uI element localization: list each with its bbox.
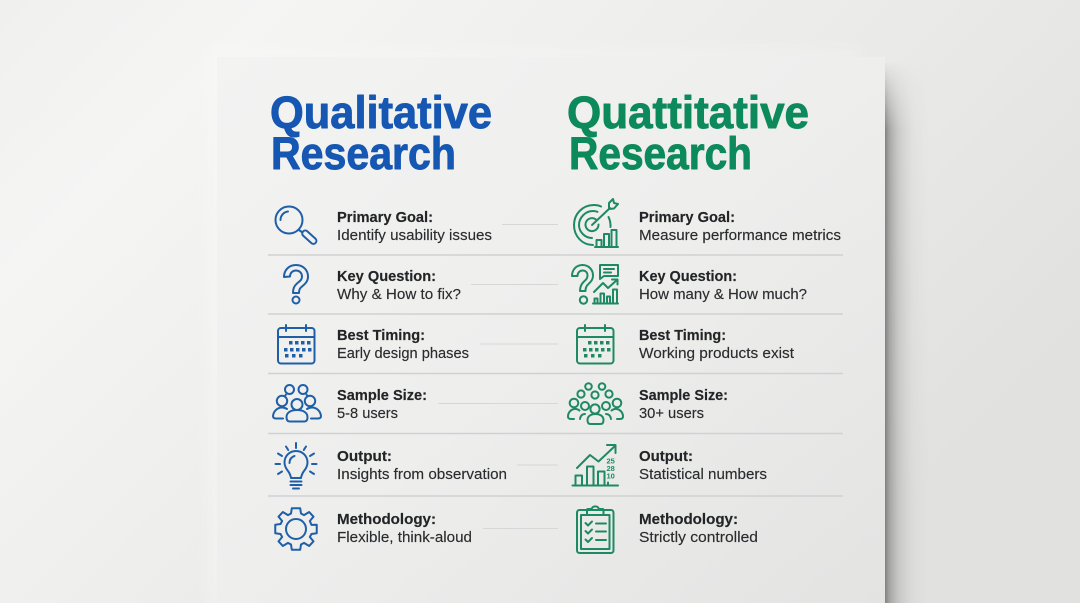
text: key question [639, 268, 807, 303]
icon: growth chart with numbers [572, 445, 618, 486]
paper glow [212, 52, 860, 603]
text: primary goal: Measure performance metrics [639, 227, 841, 244]
icon: user group [273, 385, 321, 422]
row: methodology [275, 508, 472, 550]
text: best timing: Early design phases [337, 345, 469, 362]
icon: magnifying glass [276, 206, 318, 245]
text: output [639, 448, 767, 483]
icon: clipboard checklist [577, 506, 614, 553]
paper sheet [217, 57, 885, 603]
text: sample size [337, 387, 427, 422]
text: best timing: Best Timing: [639, 327, 726, 344]
heading: qualitative research: Qualitative [270, 87, 492, 138]
row: output [572, 445, 767, 486]
text: methodology: Methodology: [639, 511, 738, 528]
text: sample size: 30+ users [639, 405, 704, 422]
text: output: Output: [337, 448, 392, 465]
text: sample size: Sample Size: [639, 387, 728, 404]
text: primary goal [639, 209, 841, 244]
text: output: Insights from observation [337, 466, 507, 483]
text: methodology [337, 511, 472, 546]
panel: qualitative column [268, 87, 560, 550]
paper shadow [885, 68, 912, 603]
icon: growth chart with numbers: 28 [606, 464, 615, 473]
text: output: Output: [639, 448, 693, 465]
text: methodology [639, 511, 758, 546]
icon: target with bars [574, 199, 618, 247]
heading: qualitative research: Research [271, 128, 456, 179]
text: methodology: Strictly controlled [639, 529, 758, 546]
row: methodology [577, 506, 758, 553]
text: key question: Why & How to fix? [337, 286, 461, 303]
text: output: Statistical numbers [639, 466, 767, 483]
text: key question: Key Question: [337, 268, 436, 285]
text: sample size [639, 387, 728, 422]
text: methodology: Flexible, think-aloud [337, 529, 472, 546]
text: primary goal: Primary Goal: [639, 209, 735, 226]
row: sample size [273, 385, 427, 422]
icon: question mark [284, 265, 308, 304]
icon: growth chart with numbers: 25 [606, 456, 615, 466]
panel: quantitative column [560, 87, 843, 553]
row: sample size [568, 383, 728, 424]
text: key question [337, 268, 461, 303]
icon: calendar [278, 325, 314, 364]
text: methodology: Methodology: [337, 511, 436, 528]
row: best timing [577, 325, 795, 364]
text: sample size: 5-8 users [337, 405, 398, 422]
icon: calendar [577, 325, 614, 364]
icon: crowd [568, 383, 623, 424]
heading: quantitative research: Quattitative [567, 87, 809, 138]
heading: quantitative research: Research [569, 128, 752, 179]
row: output [276, 443, 507, 488]
heading: quantitative research [567, 87, 809, 179]
row: key question [284, 265, 461, 304]
text: best timing: Working products exist [639, 345, 795, 362]
row: primary goal [276, 206, 492, 245]
icon: question and chart [572, 265, 618, 304]
icon: growth chart with numbers: 10 [606, 472, 615, 480]
text: sample size: Sample Size: [337, 387, 427, 404]
icon: light bulb [276, 443, 316, 488]
text: primary goal: Primary Goal: [337, 209, 433, 226]
text: best timing [639, 327, 795, 362]
text: output [337, 448, 507, 483]
icon: gear [275, 508, 317, 550]
row: primary goal [574, 199, 841, 247]
text: best timing [337, 327, 469, 362]
heading: qualitative research [270, 87, 492, 179]
text: key question: Key Question: [639, 268, 737, 285]
text: key question: How many & How much? [639, 286, 807, 303]
text: primary goal: Identify usability issues [337, 227, 492, 244]
text: primary goal [337, 209, 492, 244]
text: best timing: Best Timing: [337, 327, 425, 344]
row: key question [572, 265, 807, 304]
row: best timing [278, 325, 469, 364]
